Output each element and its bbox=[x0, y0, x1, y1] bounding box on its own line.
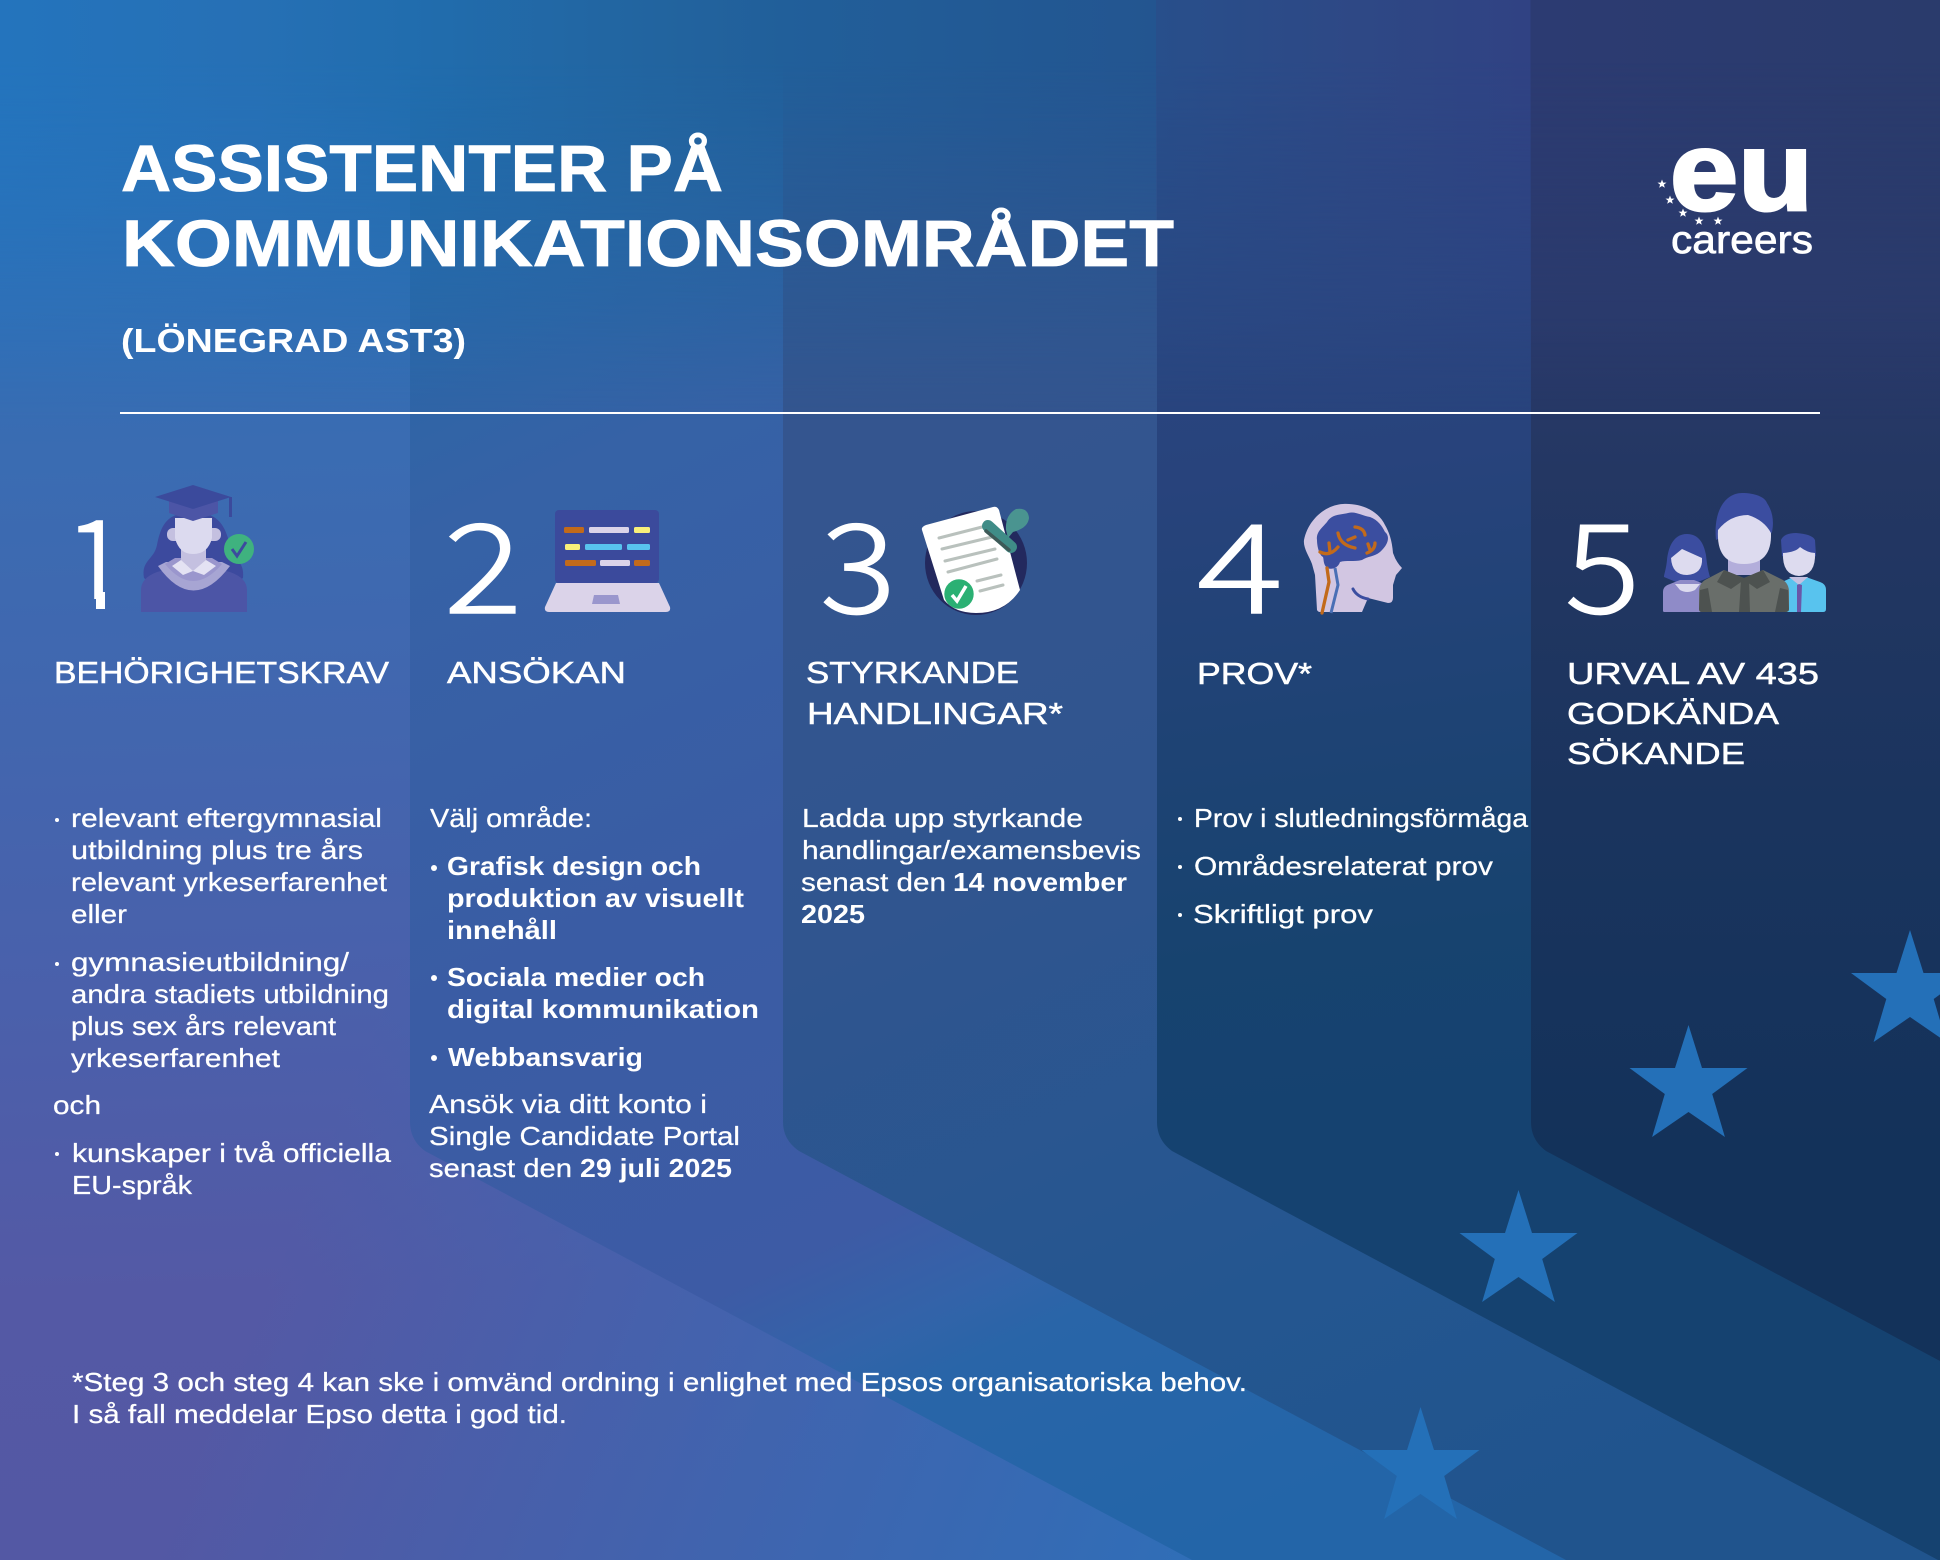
number 3: 3 bbox=[820, 469, 896, 649]
test list bbox=[1178, 803, 1529, 929]
application text: senast den bbox=[429, 1153, 572, 1183]
requirements list: EU-språk bbox=[72, 1170, 193, 1200]
requirements list: gymnasieutbildning/ bbox=[71, 947, 350, 977]
background column panel 5 bbox=[1531, 0, 1940, 1361]
requirements list: plus sex års relevant bbox=[71, 1011, 337, 1041]
requirements list: relevant yrkeserfarenhet bbox=[71, 867, 388, 897]
heading: HANDLINGAR* bbox=[807, 696, 1063, 731]
background column panel 2 bbox=[410, 0, 1940, 1560]
logo: EU careers: eu bbox=[1670, 109, 1813, 234]
number 5: 5 bbox=[1565, 469, 1640, 649]
number 1 bbox=[78, 520, 105, 609]
footnote bbox=[72, 1367, 1247, 1429]
step 4: prov bbox=[1178, 469, 1529, 929]
background column panel 4 bbox=[1157, 0, 1940, 1560]
application text: innehåll bbox=[447, 915, 557, 945]
title: ASSISTENTER PÅ bbox=[121, 131, 723, 205]
application text: Ansök via ditt konto i bbox=[429, 1089, 707, 1119]
icon: graduate with check bbox=[141, 485, 254, 612]
requirements list: kunskaper i två officiella bbox=[72, 1138, 392, 1168]
icon: head with brain bbox=[1304, 504, 1402, 613]
subtitle: (LÖNEGRAD AST3) bbox=[121, 322, 466, 359]
title bbox=[121, 131, 1174, 280]
heading bbox=[1567, 656, 1819, 771]
step 5: urval bbox=[1565, 469, 1826, 771]
decorative EU stars bbox=[1362, 930, 1940, 1519]
background top colour wash bbox=[255, 0, 1531, 274]
supporting documents text: 2025 bbox=[801, 899, 865, 929]
test list: Skriftligt prov bbox=[1193, 899, 1373, 929]
application text: Välj område: bbox=[430, 803, 592, 833]
heading bbox=[806, 655, 1063, 731]
step 1: behörighetskrav bbox=[53, 465, 392, 1200]
icon: laptop bbox=[545, 510, 670, 612]
heading: GODKÄNDA bbox=[1567, 696, 1779, 731]
requirements list: relevant eftergymnasial bbox=[71, 803, 382, 833]
requirements list: yrkeserfarenhet bbox=[71, 1043, 281, 1073]
number 2: 2 bbox=[444, 469, 522, 649]
logo: EU careers: careers bbox=[1671, 219, 1813, 262]
footnote: I så fall meddelar Epso detta i god tid. bbox=[72, 1399, 567, 1429]
step 3: styrkande handlingar bbox=[801, 469, 1141, 929]
supporting documents text bbox=[801, 803, 1141, 929]
requirements list: utbildning plus tre års bbox=[71, 835, 363, 865]
title: KOMMUNIKATIONSOMRÅDET bbox=[122, 206, 1174, 280]
application text bbox=[429, 803, 759, 1183]
footnote: *Steg 3 och steg 4 kan ske i omvänd ordning i enlighet med Epsos organisatoriska behov. bbox=[72, 1367, 1247, 1397]
requirements list: eller bbox=[71, 899, 127, 929]
heading: ANSÖKAN bbox=[447, 655, 626, 690]
step 2: ansökan bbox=[429, 469, 759, 1183]
application text: Grafisk design och bbox=[447, 851, 701, 881]
application text: digital kommunikation bbox=[447, 994, 759, 1024]
supporting documents text: 14 november bbox=[953, 867, 1127, 897]
divider bbox=[120, 412, 1820, 414]
application text: Single Candidate Portal bbox=[429, 1121, 740, 1151]
requirements list: och bbox=[53, 1090, 101, 1120]
supporting documents text: Ladda upp styrkande bbox=[802, 803, 1083, 833]
supporting documents text: senast den bbox=[801, 867, 946, 897]
supporting documents text: handlingar/examensbevis bbox=[802, 835, 1141, 865]
application text: Webbansvarig bbox=[448, 1042, 643, 1072]
heading: URVAL AV 435 bbox=[1567, 656, 1819, 691]
application text: 29 juli 2025 bbox=[580, 1153, 732, 1183]
requirements list bbox=[53, 803, 392, 1200]
test list: Prov i slutledningsförmåga bbox=[1194, 803, 1529, 833]
requirements list: andra stadiets utbildning bbox=[71, 979, 389, 1009]
test list: Områdesrelaterat prov bbox=[1194, 851, 1493, 881]
heading: PROV* bbox=[1197, 656, 1312, 691]
number 4: 4 bbox=[1197, 469, 1283, 649]
heading: STYRKANDE bbox=[806, 655, 1019, 690]
icon: stamped document bbox=[922, 507, 1029, 615]
background column panel 3 bbox=[783, 0, 1940, 1560]
logo: EU careers bbox=[1658, 109, 1813, 262]
icon: three people bbox=[1663, 493, 1826, 612]
heading: SÖKANDE bbox=[1567, 736, 1745, 771]
heading: BEHÖRIGHETSKRAV bbox=[54, 655, 389, 690]
application text: produktion av visuellt bbox=[447, 883, 744, 913]
application text: Sociala medier och bbox=[447, 962, 705, 992]
number 1: 1 bbox=[63, 465, 129, 645]
